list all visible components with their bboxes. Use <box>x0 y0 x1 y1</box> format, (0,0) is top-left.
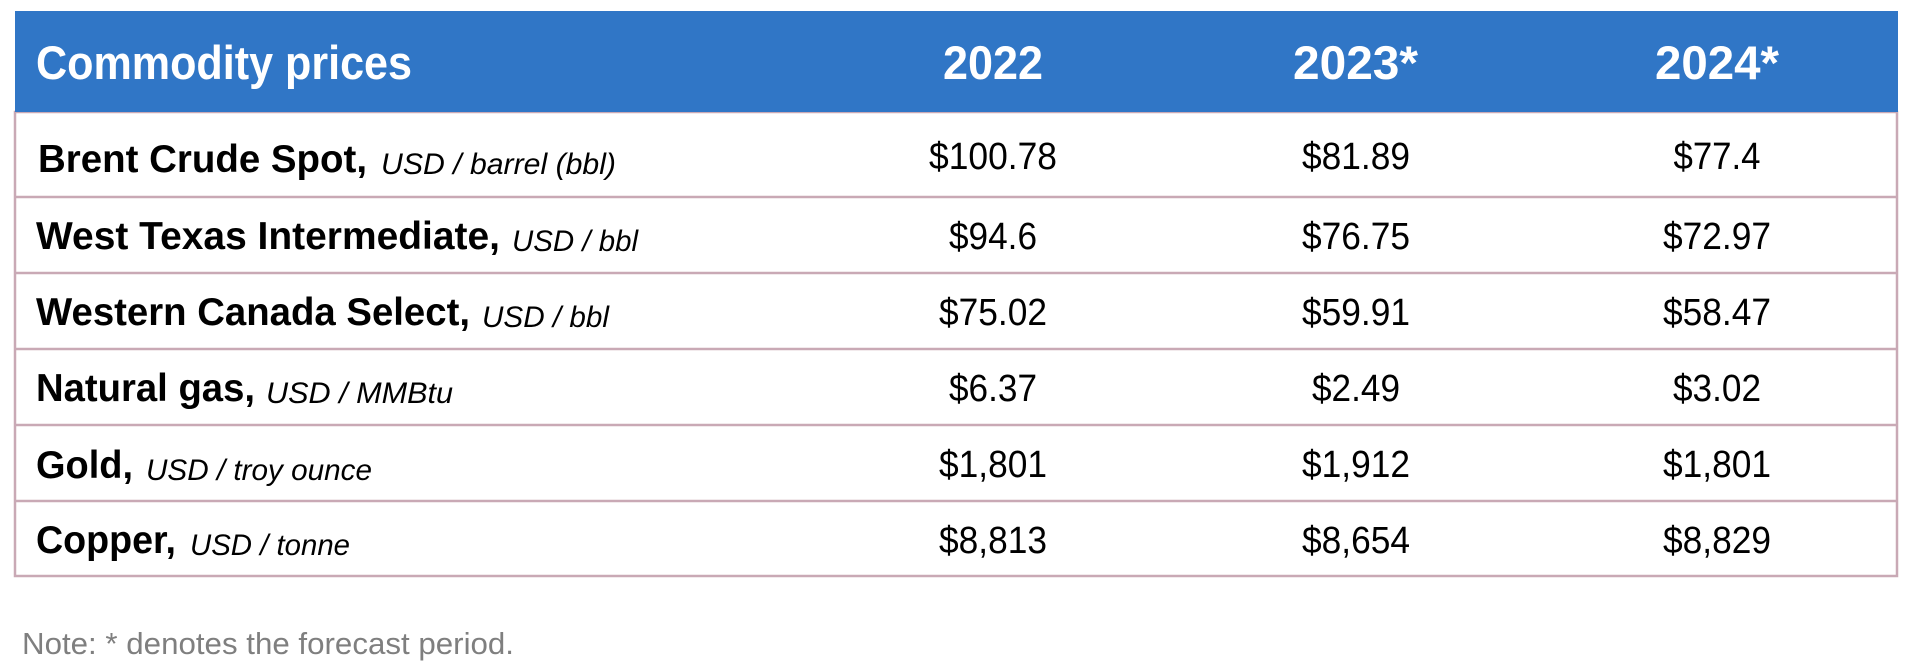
row: Copper: $8,813 <box>939 520 1047 562</box>
row: Gold <box>36 444 1771 487</box>
row: Natural gas: $3.02 <box>1673 368 1761 410</box>
row: Natural gas <box>36 367 1761 410</box>
header row: 2023* <box>1293 36 1419 89</box>
row: Copper: $8,654 <box>1302 520 1410 562</box>
row: West Texas Intermediate: West Texas Intermediate, <box>36 215 500 258</box>
row: Brent Crude Spot: $81.89 <box>1302 136 1410 178</box>
row: Brent Crude Spot: $77.4 <box>1674 136 1760 178</box>
row: Brent Crude Spot <box>38 136 1760 181</box>
row: West Texas Intermediate: $94.6 <box>949 216 1037 258</box>
row: Western Canada Select: Western Canada Select, <box>36 291 470 334</box>
row: Western Canada Select: $75.02 <box>939 292 1047 334</box>
row: Gold: $1,801 <box>1663 444 1771 486</box>
row: Natural gas: Natural gas, <box>36 367 255 410</box>
header row: 2024* <box>1655 36 1780 89</box>
row: Western Canada Select: $59.91 <box>1302 292 1410 334</box>
table body frame <box>15 112 1897 576</box>
row: West Texas Intermediate: $76.75 <box>1302 216 1410 258</box>
row: Copper: Copper, <box>36 519 176 562</box>
row: Gold: $1,912 <box>1302 444 1410 486</box>
row: West Texas Intermediate: USD / bbl <box>512 225 639 258</box>
header row <box>15 11 1898 112</box>
header row: 2022 <box>943 36 1043 89</box>
row: West Texas Intermediate: $72.97 <box>1663 216 1771 258</box>
row: Copper: USD / tonne <box>190 529 350 562</box>
row: Natural gas: $6.37 <box>949 368 1037 410</box>
row: Brent Crude Spot: $100.78 <box>929 136 1057 178</box>
row: Brent Crude Spot: Brent Crude Spot, <box>38 138 367 181</box>
row: Western Canada Select: $58.47 <box>1663 292 1771 334</box>
header row: Commodity prices <box>36 36 412 89</box>
row: Brent Crude Spot: USD / barrel (bbl) <box>381 148 616 181</box>
row: Copper <box>36 519 1771 562</box>
row: West Texas Intermediate <box>36 215 1771 258</box>
row: Natural gas: $2.49 <box>1312 368 1400 410</box>
footnote: Note: * denotes the forecast period. <box>22 626 514 661</box>
row: Gold: USD / troy ounce <box>146 454 372 487</box>
row: Copper: $8,829 <box>1663 520 1771 562</box>
row: Gold: Gold, <box>36 444 133 487</box>
row: Natural gas: USD / MMBtu <box>266 377 453 410</box>
row: Western Canada Select: USD / bbl <box>482 301 610 334</box>
row: Western Canada Select <box>36 291 1771 334</box>
row: Gold: $1,801 <box>939 444 1047 486</box>
